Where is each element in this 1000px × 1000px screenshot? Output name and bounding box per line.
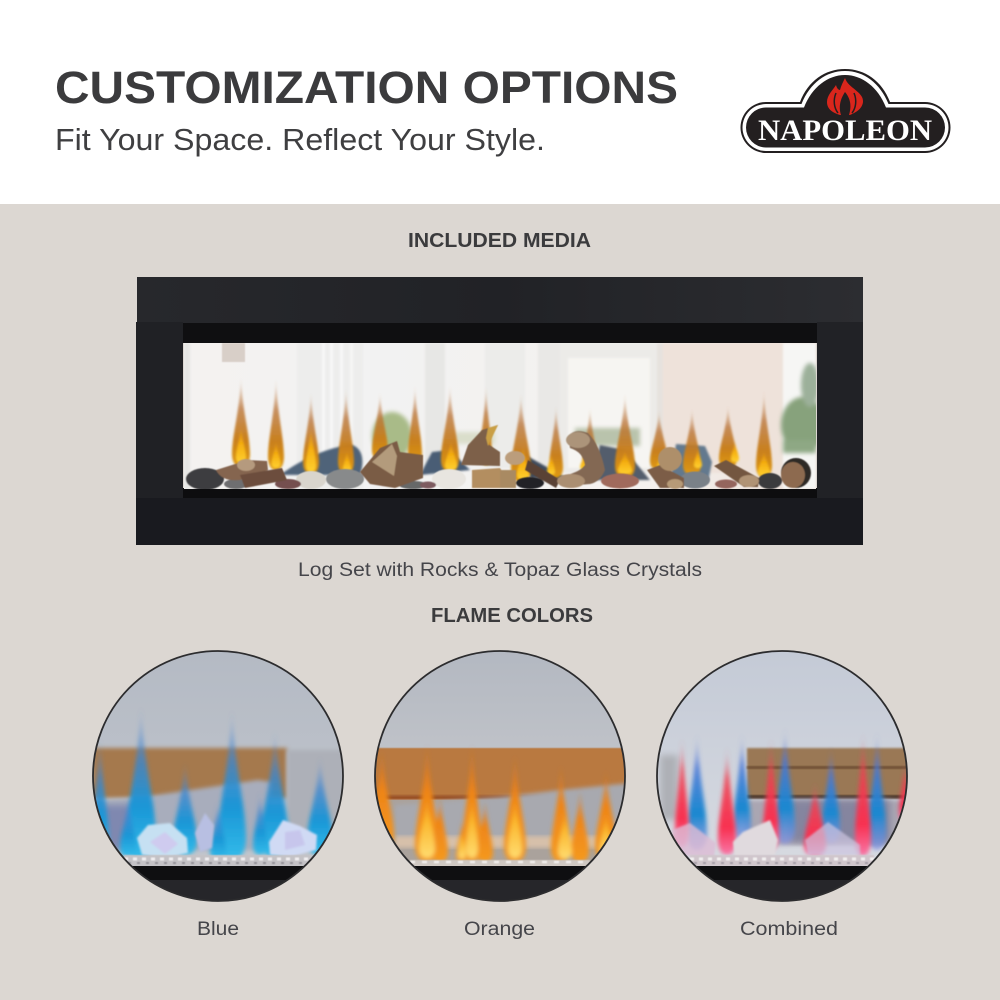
stone — [747, 800, 912, 845]
logs: left group — [216, 460, 268, 480]
lamp — [222, 343, 245, 362]
heading: flame colors: FLAME COLORS — [431, 605, 593, 627]
panel background — [0, 204, 1000, 1000]
flames — [232, 377, 772, 482]
mantel shelf — [372, 748, 632, 796]
logo wordmark: NAPOLEON — [758, 114, 932, 147]
mantel shelf — [747, 748, 912, 798]
logs: centre group — [461, 425, 500, 466]
label: combined: Combined — [740, 919, 838, 940]
window view: trees — [372, 363, 825, 460]
label: blue: Blue — [197, 919, 239, 940]
logo: Napoleon — [741, 69, 950, 153]
fireplace frame — [136, 277, 863, 545]
red flames — [672, 744, 906, 856]
title: CUSTOMIZATION OPTIONS — [55, 62, 678, 113]
circle outline — [375, 651, 625, 901]
panel: combined flame — [654, 650, 914, 904]
logs: right group — [647, 465, 684, 488]
panel: blue flame — [90, 650, 350, 904]
rocks: left group — [186, 468, 224, 490]
base — [414, 866, 586, 880]
foliage reflection — [660, 755, 678, 820]
glass bed — [690, 855, 874, 866]
stone — [92, 780, 272, 850]
glass crystals — [672, 820, 860, 858]
circle outline — [93, 651, 343, 901]
stone — [386, 800, 598, 862]
subtitle: Fit Your Space. Reflect Your Style. — [55, 122, 545, 157]
caption: log set: Log Set with Rocks & Topaz Glass Crystals — [298, 560, 702, 581]
glass bed — [410, 860, 590, 866]
panel: orange flame — [370, 650, 632, 904]
fireplace photo — [136, 277, 863, 545]
glass view: room and flames — [184, 343, 825, 490]
label: orange: Orange — [464, 919, 535, 940]
blue flames — [94, 722, 334, 857]
back stones — [280, 444, 712, 482]
logs and rocks — [186, 425, 560, 490]
room reflection: curtains and windows — [184, 343, 816, 489]
logs: tall arched log — [569, 430, 606, 486]
base — [132, 866, 304, 880]
glass crystals — [137, 813, 317, 858]
blue flames — [687, 726, 886, 850]
header background — [0, 0, 1000, 204]
orange flames — [376, 758, 616, 860]
mantel shelf — [92, 748, 287, 798]
crushed glass bed — [124, 855, 312, 866]
icon: flame — [827, 78, 863, 115]
heading: included media: INCLUDED MEDIA — [408, 230, 591, 252]
base — [696, 866, 868, 880]
rocks: right group — [601, 474, 639, 488]
circle outline — [657, 651, 907, 901]
